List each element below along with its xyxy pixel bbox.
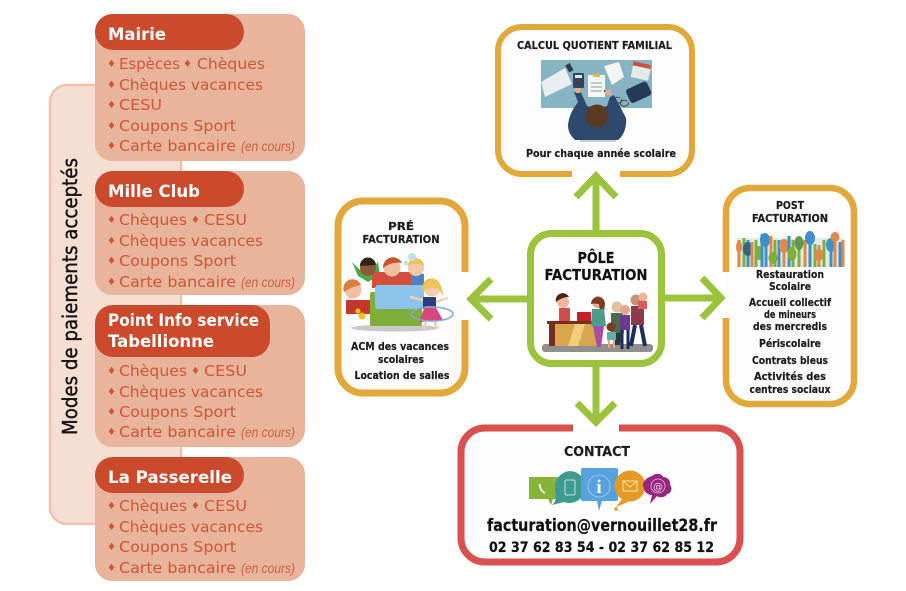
list: Mairie payment modes: ♦ [107,59,116,70]
text: activités post facturation: centres sociaux [750,383,830,396]
text: activités post facturation: Contrats bleus [752,354,828,367]
illustration: reception desk with family [542,292,653,352]
list: La Passerelle payment modes: Carte bancaire [119,559,236,577]
panel: post facturation [726,188,854,404]
text: activités post facturation: Scolaire [769,280,811,293]
caption: pour chaque année scolaire: Pour chaque année scolaire [526,147,676,160]
heading: pré facturation [362,220,440,246]
list: La Passerelle payment modes: Coupons Sport [119,538,236,556]
header: Point Info service Tabellionne [95,305,270,357]
list: Mairie payment modes: Coupons Sport [119,117,236,135]
arrow: right to post facturation [663,278,721,318]
panel: calcul quotient familial [498,27,692,174]
icons: contact speech bubbles: i [596,477,602,498]
list: Mairie payment modes: ♦ [107,80,116,91]
heading: post facturation: FACTURATION [752,212,828,225]
list: Point Info payment modes: ♦ [107,407,116,418]
list: Mille Club payment modes [107,211,295,291]
text: activités pré facturation: ACM des vacances [351,340,449,353]
list: Mairie payment modes: ♦ [183,59,192,70]
list: La Passerelle payment modes: ♦ [107,563,116,574]
list: Mairie payment modes: Espèces [119,55,180,73]
list: Point Info payment modes: Coupons Sport [119,403,236,421]
heading: pôle facturation: FACTURATION [544,266,648,284]
list: Mille Club payment modes: CESU [204,211,247,229]
list: Point Info payment modes: Chèques [119,362,187,380]
illustration: children with box [343,253,453,332]
list: Mairie payment modes: ♦ [107,141,116,152]
icons: contact speech bubbles [529,468,671,511]
panel: Point Info service Tabellionne [95,305,305,447]
list: Mille Club payment modes: ♦ [107,256,116,267]
list: Point Info payment modes: ♦ [107,387,116,398]
heading: post facturation: POST [776,199,804,212]
text: activités post facturation: de mineurs [764,308,816,321]
list: Mille Club payment modes: Coupons Sport [119,252,236,270]
list: Point Info payment modes: ♦ [107,366,116,377]
header: Mairie: Mairie [108,25,166,45]
heading: calcul quotient familial: CALCUL QUOTIENT FAMILIAL [517,39,672,52]
list: La Passerelle payment modes: (en cours) [241,560,295,576]
list: Point Info payment modes [107,362,295,441]
arrow: down to contact [577,365,615,422]
list: La Passerelle payment modes: ♦ [107,501,116,512]
arrow: up to calcul quotient familial [576,176,616,232]
list: Mille Club payment modes: Chèques [119,211,187,229]
list: La Passerelle payment modes: CESU [204,497,247,515]
list: La Passerelle payment modes: ♦ [191,501,200,512]
list: Mille Club payment modes: Chèques vacances [119,232,263,250]
text: activités post facturation: Périscolaire [759,337,821,350]
header: Mille Club: Mille Club [108,182,200,202]
panel: Mille Club [95,171,305,295]
list: Mairie payment modes: Chèques [197,55,265,73]
heading: contact: CONTACT [564,444,631,460]
list: Point Info payment modes: ♦ [107,427,116,438]
panel: pré facturation [338,201,465,393]
header: Point Info service Tabellionne: Point Info service [108,311,259,331]
header: La Passerelle [95,457,244,493]
text: activités post facturation [749,268,831,396]
list: Mille Club payment modes: ♦ [107,236,116,247]
header: La Passerelle: La Passerelle [108,468,232,488]
list: Mairie payment modes: Chèques vacances [119,76,263,94]
illustration: person at desk [541,60,652,142]
panel: contact [461,428,740,562]
text: phone numbers: 02 37 62 83 54 - 02 37 62 85 12 [489,540,714,556]
list: La Passerelle payment modes: Chèques [119,497,187,515]
heading: pré facturation: FACTURATION [362,233,440,246]
list: Mairie payment modes: CESU [119,96,162,114]
text: activités pré facturation: Location de salles [354,369,450,382]
list: Mille Club payment modes: Carte bancaire [119,273,236,291]
text: activités post facturation: Activités des [754,370,826,383]
heading: pôle facturation: PÔLE [578,248,614,267]
heading: pôle facturation [544,248,648,284]
list: Mairie payment modes [107,55,295,155]
list: La Passerelle payment modes: ♦ [107,522,116,533]
text: activités post facturation: des mercredis [753,320,827,333]
list: Mairie payment modes: ♦ [107,121,116,132]
header: Point Info service Tabellionne: Tabellionne [108,332,214,352]
arrow: left to pré facturation [471,279,529,319]
header: Mille Club [95,171,244,207]
text: email: facturation@vernouillet28.fr [487,516,718,536]
heading: post facturation [752,199,828,225]
panel: pôle facturation [530,234,662,364]
text: activités post facturation: Restauration [756,268,824,281]
list: Point Info payment modes: Chèques vacances [119,383,263,401]
list: La Passerelle payment modes [107,497,295,577]
heading: pré facturation: PRÉ [388,220,414,233]
list: Mille Club payment modes: ♦ [191,215,200,226]
text: activités pré facturation: scolaires [378,353,424,366]
header: Mairie [95,14,244,50]
list: Point Info payment modes: ♦ [191,366,200,377]
panel: La Passerelle [95,457,305,581]
illustration: cutlery [736,231,844,267]
list: Point Info payment modes: Carte bancaire [119,423,236,441]
list: Mille Club payment modes: (en cours) [241,274,295,290]
text: activités post facturation: Accueil collectif [749,296,831,309]
icons: contact speech bubbles: @ [653,482,663,493]
list: Mille Club payment modes: ♦ [107,277,116,288]
list: Point Info payment modes: (en cours) [241,424,295,440]
panel: modes de paiements acceptés bracket [50,85,181,524]
list: Point Info payment modes: CESU [204,362,247,380]
list: Mairie payment modes: (en cours) [241,138,295,154]
list: Mairie payment modes: Carte bancaire [119,137,236,155]
list: La Passerelle payment modes: ♦ [107,542,116,553]
heading: modes de paiements acceptés: Modes de paiements acceptés [58,158,82,435]
list: Mairie payment modes: ♦ [107,100,116,111]
text: activités pré facturation [351,340,450,382]
panel: Mairie [95,14,305,161]
list: Mille Club payment modes: ♦ [107,215,116,226]
list: La Passerelle payment modes: Chèques vacances [119,518,263,536]
